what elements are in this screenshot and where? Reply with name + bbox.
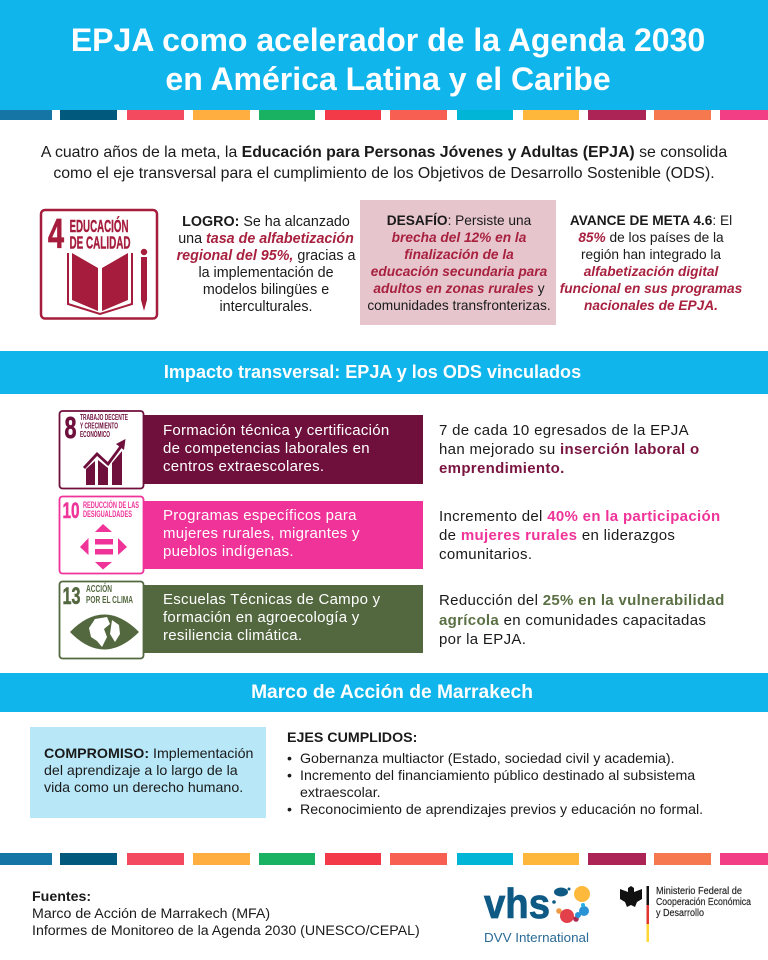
section heading: impacto transversal: [0, 351, 768, 394]
text block: logro: una tasa de alfabetización: [178, 231, 354, 247]
title: en América Latina y el Caribe: [165, 61, 611, 97]
text block: ODS 10 action: Programas específicos para: [163, 507, 357, 524]
icon: SDG 4 quality education: 4: [48, 210, 64, 257]
text block: ODS 13 action: Escuelas Técnicas de Campo y: [163, 591, 380, 608]
text block: compromiso: COMPROMISO: Implementación: [44, 746, 253, 762]
icon: SDG 13 climate action: 13: [62, 583, 80, 610]
text block: ODS 10 action: [163, 507, 360, 560]
text block: ODS 13 result: Reducción del 25% en la vulnerabilidad: [439, 592, 725, 609]
text block: logro: modelos bilingües e: [203, 282, 329, 298]
bullet text: Incremento del financiamiento público destinado al subsistema: [300, 768, 695, 784]
text block: ODS 8 action: centros extraescolares.: [163, 458, 324, 475]
text block: fuentes: Informes de Monitoreo de la Agenda 2030 (UNESCO/CEPAL): [32, 922, 420, 938]
intro text: como el eje transversal para el cumplimiento de los Objetivos de Desarrollo Sostenible (ODS).: [53, 165, 715, 182]
icon: SDG 8 decent work: ECONÓMICO: [80, 430, 110, 439]
title banner: [0, 0, 768, 110]
text block: desafío: brecha del 12% en la: [392, 230, 526, 245]
intro text: [41, 144, 728, 182]
bullet list: •: [287, 751, 292, 767]
panel: ODS 10 row: [144, 501, 423, 569]
text block: ODS 10 result: de mujeres rurales en liderazgos: [439, 527, 675, 544]
icon: SDG 13 climate action: ACCIÓN: [86, 582, 112, 595]
icon: SDG 8 decent work: [58, 410, 144, 490]
title: EPJA como acelerador de la Agenda 2030: [71, 22, 705, 58]
text block: avance de meta: alfabetización digital: [584, 264, 718, 279]
text block: compromiso: [44, 746, 253, 796]
text block: avance de meta: [560, 213, 742, 313]
bullet text: Reconocimiento de aprendizajes previos y educación no formal.: [300, 802, 703, 818]
text block: ODS 10 result: Incremento del 40% en la participación: [439, 508, 720, 525]
bullet text: Gobernanza multiactor (Estado, sociedad civil y academia).: [300, 751, 675, 767]
text block: logro: la implementación de: [198, 265, 334, 281]
section heading: marco de acción: [0, 673, 768, 712]
text block: avance de meta: AVANCE DE META 4.6: El: [570, 213, 732, 228]
text block: ODS 13 action: [163, 591, 380, 644]
text block: ODS 8 action: Formación técnica y certificación: [163, 422, 390, 439]
top SDG colour strip: [0, 110, 768, 120]
panel: desafío: [360, 200, 556, 325]
text block: ODS 10 result: comunitarios.: [439, 546, 532, 563]
logo: Ministerio Federal: y Desarrollo: [656, 908, 704, 919]
title: [71, 22, 705, 97]
text block: desafío: comunidades transfronterizas.: [367, 298, 551, 313]
text block: compromiso: vida como un derecho humano.: [44, 780, 243, 796]
heading: ejes cumplidos: EJES CUMPLIDOS:: [287, 730, 417, 746]
logo: Ministerio Federal: [620, 886, 752, 942]
text block: desafío: [367, 212, 551, 313]
text block: avance de meta: región han integrado la: [581, 247, 721, 262]
text block: ODS 8 result: han mejorado su inserción laboral o: [439, 441, 699, 458]
text block: ODS 10 action: mujeres rurales, migrantes y: [163, 525, 360, 542]
icon: SDG 4 quality education: [40, 208, 158, 320]
icon: SDG 8 decent work: 8: [64, 410, 76, 445]
icon: SDG 8 decent work: Y CRECIMIENTO: [80, 422, 118, 430]
text block: desafío: educación secundaria para: [371, 264, 547, 279]
text block: ODS 13 action: formación en agroecología y: [163, 609, 360, 626]
logo: vhs DVV International: [484, 880, 590, 945]
text block: ODS 8 result: [439, 422, 699, 477]
bullet text: extraescolar.: [300, 785, 381, 801]
bullet list: •: [287, 802, 292, 818]
text block: ODS 10 result: [439, 508, 720, 563]
text block: ODS 13 result: [439, 592, 725, 648]
text block: ODS 8 result: emprendimiento.: [439, 460, 565, 477]
text block: logro: interculturales.: [220, 299, 312, 315]
text block: ODS 8 action: [163, 422, 390, 475]
text block: fuentes: [32, 888, 420, 938]
panel: compromiso: [30, 727, 266, 818]
bullet text: [300, 751, 703, 818]
text block: ODS 13 action: resiliencia climática.: [163, 627, 302, 644]
text block: ODS 13 result: agrícola en comunidades capacitadas: [439, 612, 706, 628]
bullet list: [287, 751, 292, 818]
text block: logro: regional del 95%, gracias a: [177, 248, 355, 264]
text block: desafío: adultos en zonas rurales y: [373, 281, 545, 296]
text block: ejes cumplidos: [287, 730, 703, 818]
section heading: marco de acción: Marco de Acción de Marrakech: [251, 682, 533, 703]
text block: compromiso: del aprendizaje a lo largo de la: [44, 763, 238, 779]
text block: ODS 10 action: pueblos indígenas.: [163, 543, 294, 560]
panel: ODS 8 row: [144, 415, 423, 484]
bullet list: •: [287, 768, 292, 784]
text block: logro: LOGRO: Se ha alcanzado: [182, 214, 350, 230]
text block: desafío: DESAFÍO: Persiste una: [387, 213, 531, 228]
bottom SDG colour strip: [0, 853, 768, 865]
text block: ODS 8 action: de competencias laborales en: [163, 440, 370, 457]
section heading: impacto transversal: Impacto transversal: EPJA y los ODS vinculados: [164, 362, 581, 382]
text block: logro: [176, 214, 356, 315]
text block: avance de meta: nacionales de EPJA.: [584, 298, 718, 313]
icon: SDG 10 reduced inequalities: 10: [62, 498, 80, 523]
intro text: A cuatro años de la meta, la Educación para Personas Jóvenes y Adultas (EPJA) se consolida: [41, 144, 727, 161]
text block: fuentes: Fuentes:: [32, 888, 91, 904]
text block: ODS 13 result: por la EPJA.: [439, 631, 526, 648]
panel: ODS 13 row: [144, 585, 423, 653]
icon: SDG 13 climate action: [58, 580, 144, 660]
logo: vhs DVV International: vhs: [484, 880, 550, 927]
text block: fuentes: Marco de Acción de Marrakech (MFA): [32, 906, 270, 922]
logo: vhs DVV International: DVV International: [484, 930, 589, 945]
text block: avance de meta: 85% de los países de la: [578, 230, 724, 245]
logo: Ministerio Federal: Ministerio Federal de: [656, 886, 742, 897]
text block: avance de meta: funcional en sus programas: [560, 281, 742, 296]
text block: desafío: finalización de la: [404, 247, 514, 262]
icon: SDG 10 reduced inequalities: [58, 496, 144, 574]
text block: ODS 8 result: 7 de cada 10 egresados de la EPJA: [439, 422, 689, 439]
